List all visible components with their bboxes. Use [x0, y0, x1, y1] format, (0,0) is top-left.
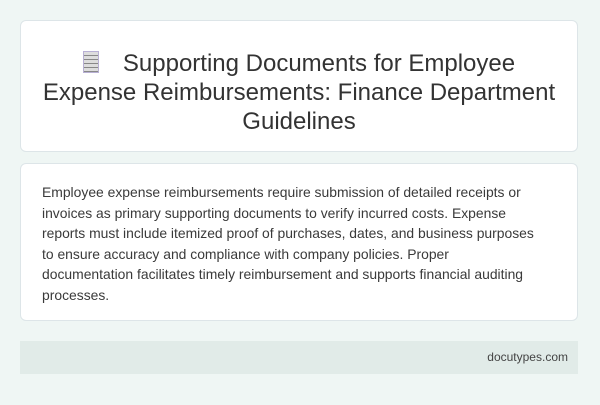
description text: documentation facilitates timely reimbursement and supports financial auditing	[42, 266, 523, 282]
description text: processes.	[42, 287, 109, 303]
icon: receipt	[83, 51, 99, 73]
header card	[20, 20, 578, 152]
title: Supporting Documents for Employee	[123, 50, 515, 77]
description text: reports must include itemized proof of purchases, dates, and business purposes	[42, 225, 534, 241]
description card	[20, 163, 578, 321]
description text: to ensure accuracy and compliance with company policies. Proper	[42, 246, 449, 262]
footer bar	[20, 341, 578, 374]
title: Expense Reimbursements: Finance Department	[43, 79, 555, 106]
description text	[42, 184, 534, 303]
description text: invoices as primary supporting documents to verify incurred costs. Expense	[42, 205, 506, 221]
description text: Employee expense reimbursements require submission of detailed receipts or	[42, 184, 521, 200]
title	[43, 50, 555, 135]
footer credit: docutypes.com	[487, 350, 568, 364]
title: Guidelines	[242, 108, 356, 135]
